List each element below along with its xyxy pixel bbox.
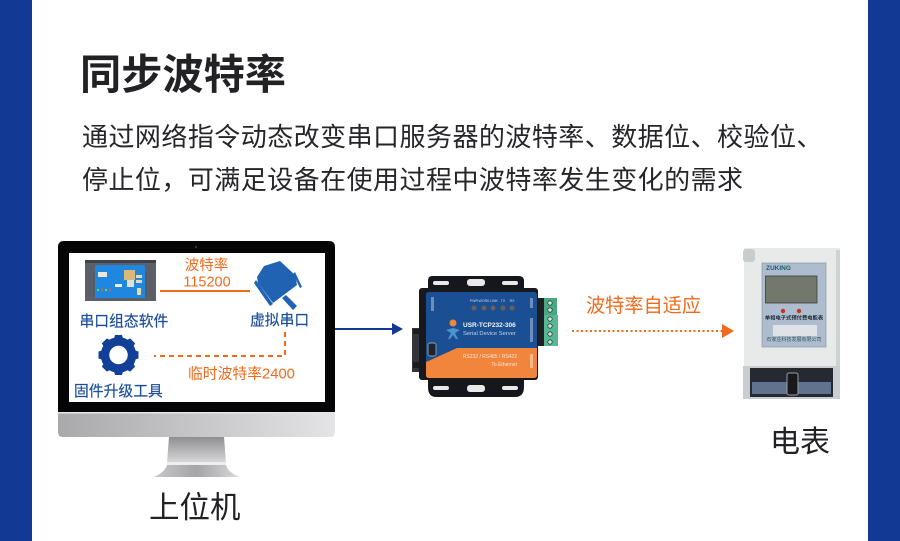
- right blue side band: [868, 0, 900, 541]
- label: baud rate 115200: [183, 257, 231, 290]
- serial device server: [412, 276, 558, 397]
- LED labels: PWR: [470, 299, 479, 303]
- configuration software screenshot: [85, 260, 156, 301]
- label: firmware upgrade tool: 固件升级工具: [74, 383, 163, 400]
- meter brand: ZUKING: [766, 265, 791, 272]
- icon: gear: [98, 335, 138, 375]
- monitor stand: [154, 437, 239, 477]
- LED labels: LINK: [490, 299, 499, 303]
- LED labels: [470, 299, 515, 303]
- monitor: [58, 241, 335, 477]
- meter label plate: [762, 263, 826, 347]
- interface label: RS232 / RS485 / RS422: [463, 354, 517, 360]
- meter buttons: [781, 309, 785, 313]
- meter caption: 单相电子式预付费电能表: [765, 314, 824, 322]
- monitor chin: [58, 412, 335, 437]
- DB9 port: [412, 328, 420, 372]
- left blue side band: [0, 0, 32, 541]
- description text: [82, 122, 823, 195]
- USB port: [428, 343, 436, 356]
- webcam: [195, 246, 197, 248]
- meter bottom terminal: [743, 366, 840, 399]
- mounting flanges: [428, 276, 524, 289]
- meter data box: [773, 325, 817, 336]
- orange face: [426, 348, 537, 378]
- model label: USR-TCP232-306: [463, 322, 516, 329]
- LED labels: TX: [501, 299, 506, 303]
- label: serial configuration software: 串口组态软件: [80, 313, 168, 330]
- label: electric meter: 电表: [770, 426, 830, 459]
- icon: virtual serial port connector: [254, 261, 302, 310]
- dashed orange link line: [154, 332, 285, 356]
- side port labels: [431, 297, 533, 368]
- meter maker: 石家庄科技发展有限公司: [766, 336, 822, 343]
- monitor screen: [69, 253, 325, 402]
- serial device server: Serial Device Server: [463, 331, 516, 337]
- title: 同步波特率: [80, 52, 286, 98]
- serial device server: To Ethernet: [491, 362, 518, 368]
- label: virtual serial port: 虚拟串口: [250, 312, 309, 329]
- label: baud rate auto adapt: 波特率自适应: [586, 295, 701, 317]
- green terminals: [544, 298, 557, 315]
- label: baud rate 115200: 波特率: [185, 257, 228, 274]
- solid orange link line: [160, 290, 250, 292]
- description text: 停止位，可满足设备在使用过程中波特率发生变化的需求: [82, 165, 744, 195]
- arrow: monitor to server: [335, 323, 403, 335]
- description text: 通过网络指令动态改变串口服务器的波特率、数据位、校验位、: [82, 122, 823, 152]
- meter LCD: [766, 276, 817, 303]
- LED labels: RX: [510, 299, 515, 303]
- label: host computer: 上位机: [149, 491, 240, 525]
- dotted arrow: server to meter: [572, 324, 734, 338]
- label: baud rate 115200: 115200: [183, 274, 231, 290]
- electric meter: [743, 248, 840, 399]
- LED labels: WORK: [479, 299, 490, 303]
- logo figure: [446, 320, 460, 339]
- monitor bezel: [58, 241, 335, 412]
- status LEDs: [472, 306, 514, 310]
- label: temporary baud rate 2400: 临时波特率2400: [188, 366, 295, 382]
- meter top cover: [744, 248, 840, 367]
- case body: [419, 288, 538, 380]
- blue face: [426, 292, 537, 362]
